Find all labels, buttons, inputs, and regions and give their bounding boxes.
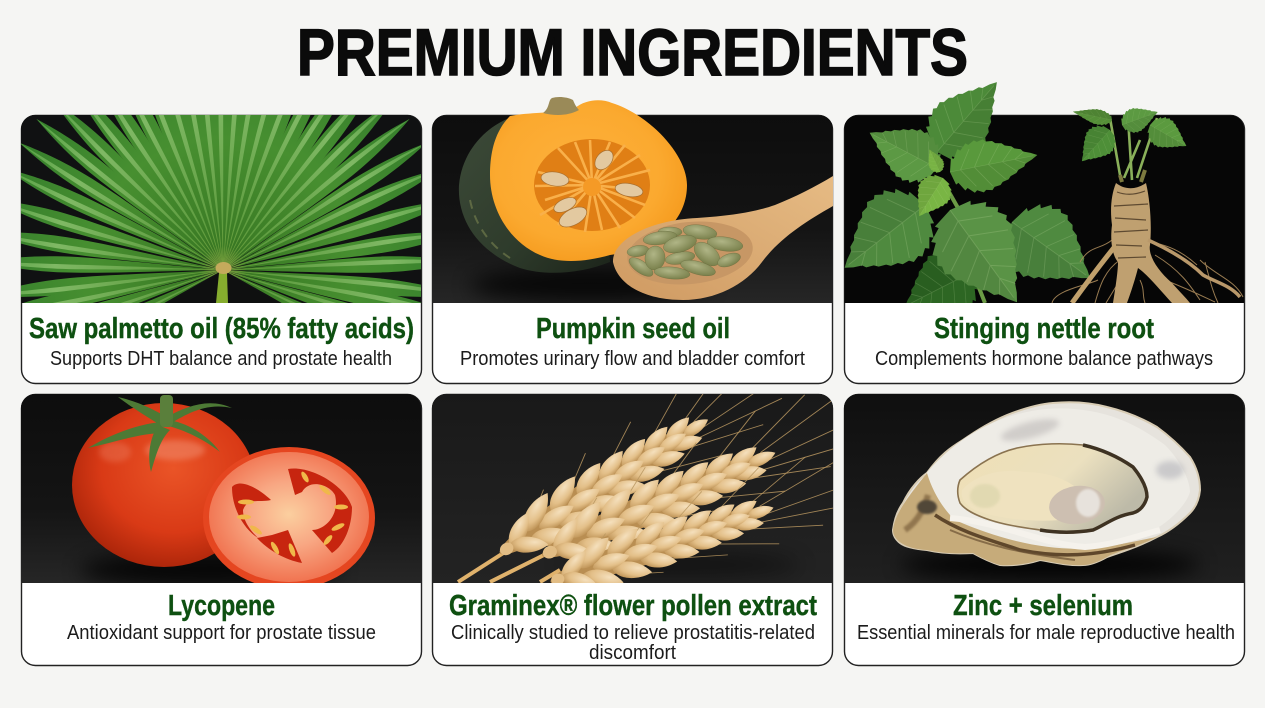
description: saw palmetto: Supports DHT balance and prostate health — [50, 348, 392, 370]
panel: zinc + selenium — [844, 394, 1244, 666]
description: lycopene: Antioxidant support for prostate tissue — [67, 622, 376, 644]
description: zinc + selenium: Essential minerals for male reproductive health — [857, 622, 1235, 644]
image: pumpkin and spoon — [459, 97, 833, 303]
description: graminex: Clinically studied to relieve prostatitis-related — [451, 622, 815, 644]
description: nettle: Complements hormone balance pathways — [875, 348, 1213, 370]
heading: saw palmetto: Saw palmetto oil (85% fatty acids) — [29, 313, 414, 345]
heading: pumpkin: Pumpkin seed oil — [536, 313, 730, 345]
panel: pumpkin seed oil — [432, 97, 833, 384]
heading: lycopene: Lycopene — [168, 590, 275, 622]
description line 2: graminex: discomfort — [589, 642, 676, 664]
heading: graminex: Graminex® flower pollen extract — [449, 590, 817, 622]
image background — [432, 116, 832, 304]
heading: zinc + selenium: Zinc + selenium — [953, 590, 1133, 622]
description: pumpkin: Promotes urinary flow and bladder comfort — [460, 348, 805, 370]
panel: saw palmetto oil — [20, 114, 422, 384]
image background — [844, 116, 1244, 304]
image: nettle plant and root — [844, 82, 1244, 303]
image: wheat ears — [432, 394, 833, 583]
image: palm frond — [21, 115, 421, 303]
panel: graminex flower pollen extract — [432, 394, 834, 666]
panel: lycopene — [21, 394, 422, 666]
image: oyster — [844, 394, 1244, 583]
title: PREMIUM INGREDIENTS — [297, 15, 968, 89]
image: tomatoes — [21, 394, 421, 589]
panel: stinging nettle root — [844, 82, 1246, 384]
heading: nettle: Stinging nettle root — [934, 313, 1154, 345]
